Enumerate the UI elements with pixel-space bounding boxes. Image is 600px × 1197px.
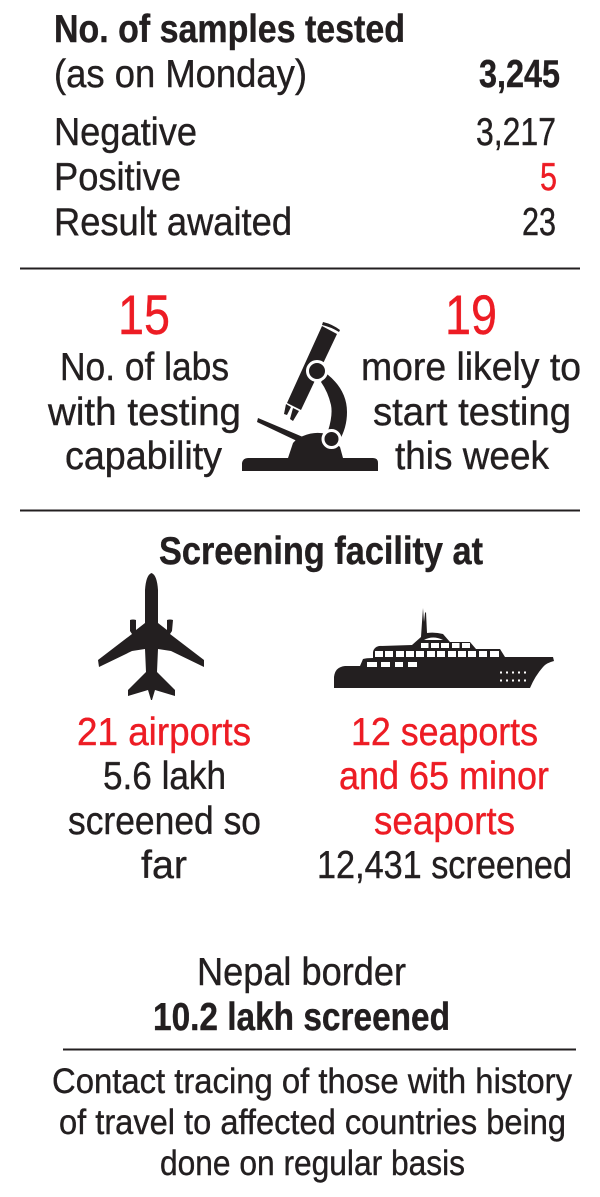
text: contact tracing note: of travel to affected countries being	[59, 1103, 566, 1142]
text: contact tracing note: done on regular basis	[160, 1144, 465, 1183]
stat: Nepal border screened: 10.2 lakh screened	[153, 996, 450, 1039]
text: more likely to start testing: this week	[395, 435, 549, 478]
label: as on Monday: (as on Monday)	[54, 53, 307, 96]
number: result awaited: 23	[522, 201, 556, 244]
icon: airplane	[98, 573, 204, 700]
stat: seaports: and 65 minor	[339, 755, 549, 798]
number: total samples: 3,245	[479, 53, 560, 96]
stat: seaports	[339, 711, 549, 843]
text: airport screening: 5.6 lakh	[103, 755, 226, 798]
panel: samples tested	[54, 8, 560, 244]
panel: labs	[47, 283, 581, 478]
label: result awaited: Result awaited	[54, 201, 292, 244]
text: labs with testing capability: with testing	[47, 391, 241, 434]
stat: airports: 21 airports	[77, 711, 251, 754]
stat: seaports: 12 seaports	[351, 711, 538, 754]
text: labs with testing capability	[47, 346, 241, 478]
text: seaport screening: 12,431 screened	[317, 844, 572, 887]
text: contact tracing note: Contact tracing of those with history	[52, 1062, 572, 1101]
stat: seaports: seaports	[374, 800, 515, 843]
panel: airports	[68, 711, 261, 887]
text: airport screening: far	[141, 844, 187, 887]
text: airport screening	[68, 755, 261, 887]
icon: ship	[334, 608, 554, 688]
heading: samples tested: No. of samples tested	[54, 8, 405, 51]
label: negative: Negative	[54, 111, 197, 154]
text: more likely to start testing: more likely to	[361, 346, 581, 389]
heading: screening facility: Screening facility at	[159, 530, 483, 573]
panel: seaports	[317, 711, 572, 887]
text: airport screening: screened so	[68, 800, 261, 843]
icon: microscope	[242, 322, 378, 471]
number: negative: 3,217	[476, 111, 556, 154]
text: more likely to start testing: start testing	[373, 391, 571, 434]
text: labs with testing capability: No. of labs	[60, 346, 229, 389]
text: more likely to start testing	[361, 346, 581, 478]
text: contact tracing note	[52, 1062, 572, 1183]
number: 19 labs: 19	[445, 283, 497, 346]
text: labs with testing capability: capability	[65, 435, 222, 478]
panel: Nepal border	[153, 951, 450, 1039]
label: Nepal border: Nepal border	[197, 951, 406, 994]
label: positive: Positive	[54, 156, 181, 199]
number: 15 labs: 15	[118, 283, 170, 346]
number: positive: 5	[540, 156, 557, 199]
